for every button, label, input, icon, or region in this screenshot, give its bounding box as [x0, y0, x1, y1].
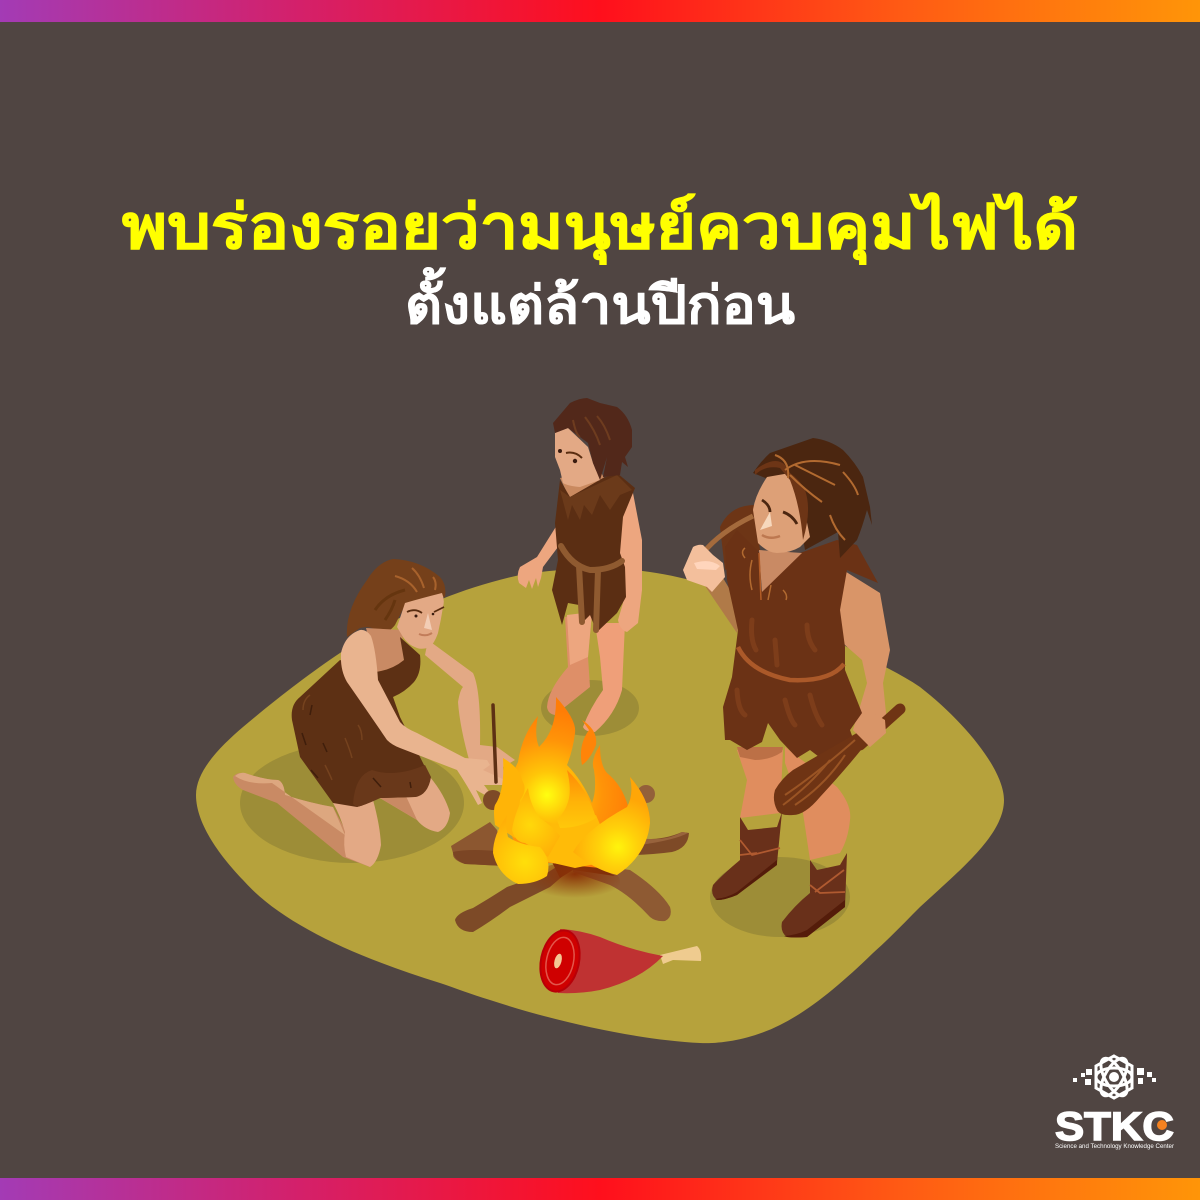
man: [683, 438, 900, 938]
base flame: [535, 815, 615, 868]
man hair strands: [755, 461, 808, 540]
title: [122, 192, 1078, 335]
bottom gradient bar: [0, 1178, 1200, 1200]
wisp: [581, 720, 596, 765]
woman back leg: [233, 773, 380, 867]
campfire: [451, 697, 689, 932]
club: [774, 709, 900, 815]
logo wordmark: STKC: [1055, 1105, 1174, 1149]
man tunic: [723, 530, 878, 763]
meat: [534, 926, 701, 996]
boy belt: [561, 546, 622, 630]
boy left arm: [518, 525, 558, 589]
logo atom icon: [1096, 1054, 1132, 1100]
boy face: [555, 428, 600, 487]
woman hair back: [347, 559, 445, 637]
man right leg: [785, 747, 850, 860]
title: ตั้งแต่ล้านปีก่อน: [405, 267, 795, 335]
hair highlights: [395, 568, 436, 592]
boy: [518, 398, 642, 736]
chest skin: [366, 628, 404, 672]
boy shadow: [541, 680, 639, 736]
top gradient bar: [0, 0, 1200, 22]
logo pixel squares: [1073, 1068, 1156, 1085]
front left flame: [493, 815, 548, 884]
woman dress: [292, 637, 430, 807]
man belt: [738, 647, 844, 680]
man left leg: [737, 750, 783, 818]
man back fur: [720, 505, 760, 570]
man club hand: [853, 712, 886, 747]
boy hair: [553, 398, 632, 480]
man hanging arm (left): [703, 578, 742, 633]
woman front arm: [341, 630, 505, 805]
title: พบร่องรอยว่ามนุษย์ควบคุมไฟได้: [122, 192, 1078, 265]
boy tunic: [552, 473, 635, 632]
inner left flame: [512, 788, 560, 857]
logs: [451, 785, 689, 932]
logo: STKC: [1055, 1054, 1174, 1150]
left flame: [494, 758, 525, 838]
fire glow: [530, 862, 620, 902]
man boots: [712, 812, 847, 938]
man shadow: [710, 857, 850, 937]
rear arm: [425, 640, 515, 785]
boy legs: [547, 613, 592, 715]
logo tagline: Science and Technology Knowledge Center: [1055, 1144, 1174, 1150]
woman: [233, 559, 515, 867]
logo dot: [1157, 1120, 1167, 1130]
stick: [493, 705, 496, 782]
woman right knee: [380, 777, 450, 832]
man face: [753, 473, 810, 553]
woman shadow: [240, 743, 464, 863]
center flame: [557, 770, 596, 828]
right flame: [573, 777, 650, 875]
woman face: [397, 593, 444, 649]
woman thigh: [333, 800, 381, 867]
man strap: [703, 516, 753, 553]
back flame: [500, 697, 650, 870]
ground: [196, 568, 1004, 1043]
man hair back: [753, 438, 872, 558]
man hand: [683, 545, 725, 592]
boy neck: [560, 470, 605, 499]
man collar: [759, 550, 802, 592]
man right arm: [830, 565, 890, 747]
boy right arm: [612, 493, 642, 632]
